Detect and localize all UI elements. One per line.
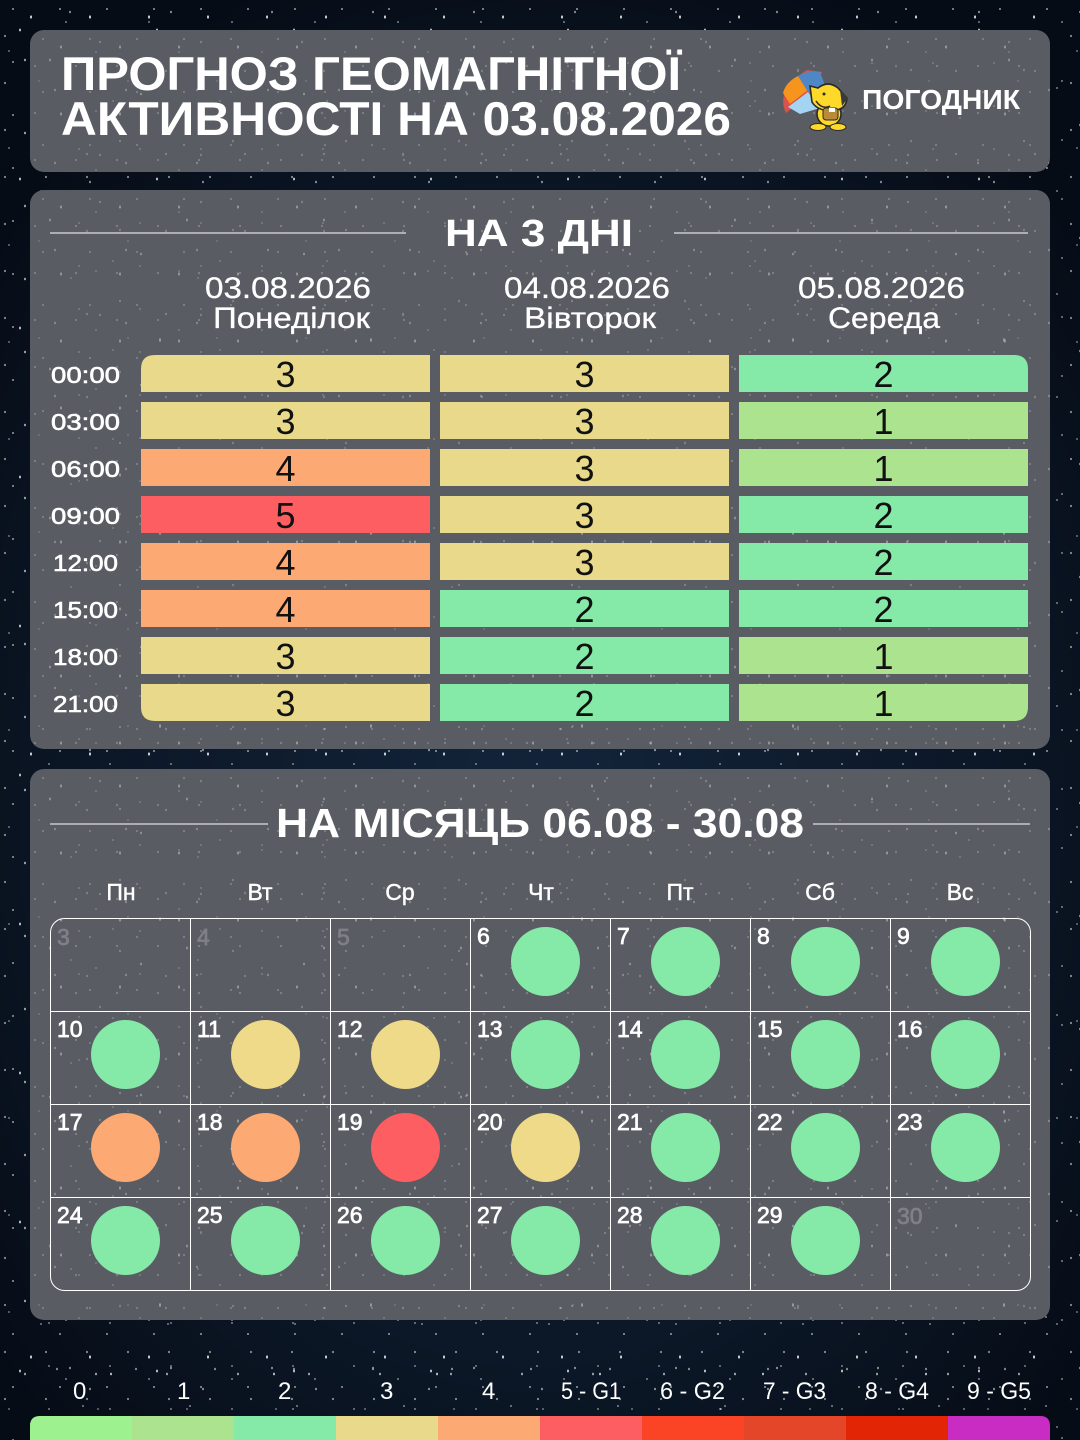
calendar day numbers: 25 bbox=[197, 1202, 223, 1228]
calendar day numbers: 18 bbox=[197, 1109, 223, 1135]
forecast column: Monday bbox=[141, 354, 430, 724]
calendar day numbers: 5 bbox=[337, 924, 350, 950]
weekday labels: Пт bbox=[666, 879, 694, 905]
forecast column: Wednesday: 2 bbox=[873, 354, 894, 395]
date headers: 03.08.2026 bbox=[205, 272, 371, 305]
calendar day numbers: 17 bbox=[57, 1109, 83, 1135]
legend labels: 2 bbox=[278, 1378, 291, 1405]
calendar day numbers: 3 bbox=[57, 924, 70, 950]
forecast column: Tuesday: 3 bbox=[574, 401, 595, 442]
weekday labels: Ср bbox=[385, 879, 415, 905]
legend labels: 7 - G3 bbox=[763, 1378, 826, 1405]
forecast column: Monday: 4 bbox=[275, 542, 296, 583]
calendar day numbers: 15 bbox=[757, 1016, 783, 1042]
time labels: 03:00 bbox=[51, 409, 120, 435]
calendar day numbers: 12 bbox=[337, 1016, 363, 1042]
calendar day numbers: 13 bbox=[477, 1016, 503, 1042]
calendar day numbers: 8 bbox=[757, 923, 770, 949]
calendar day numbers: 14 bbox=[617, 1016, 643, 1042]
logo wordmark: ПОГОДНИК bbox=[862, 84, 1021, 115]
date headers: Вівторок bbox=[524, 302, 657, 335]
time labels: 12:00 bbox=[53, 550, 118, 576]
legend labels: 6 - G2 bbox=[660, 1378, 725, 1405]
weekday labels: Вс bbox=[947, 879, 973, 905]
time labels: 09:00 bbox=[51, 503, 120, 529]
calendar day numbers: 16 bbox=[897, 1016, 923, 1042]
legend labels: 3 bbox=[380, 1378, 393, 1405]
forecast column: Monday: 5 bbox=[275, 495, 296, 536]
calendar day numbers bbox=[57, 923, 923, 1229]
legend labels: 4 bbox=[482, 1378, 495, 1405]
panel: 3-day forecast bbox=[30, 190, 1050, 749]
calendar day numbers: 23 bbox=[897, 1109, 923, 1135]
forecast column: Wednesday: 2 bbox=[873, 542, 894, 583]
weekday labels: Сб bbox=[805, 879, 835, 905]
forecast column: Wednesday: 2 bbox=[873, 495, 894, 536]
heading: month: НА МІСЯЦЬ 06.08 - 30.08 bbox=[276, 800, 804, 846]
calendar day numbers: 10 bbox=[57, 1016, 83, 1042]
forecast column: Tuesday: 2 bbox=[574, 683, 595, 724]
calendar day numbers: 24 bbox=[57, 1202, 83, 1228]
date headers: 05.08.2026 bbox=[798, 272, 965, 305]
forecast column: Wednesday: 1 bbox=[873, 448, 894, 489]
weekday labels bbox=[106, 879, 973, 905]
forecast column: Wednesday bbox=[739, 354, 1028, 724]
title: ПРОГНОЗ ГЕОМАГНІТНОЇ bbox=[61, 47, 682, 100]
calendar day numbers: 7 bbox=[617, 923, 630, 949]
forecast column: Monday: 3 bbox=[275, 636, 296, 677]
forecast column: Wednesday: 2 bbox=[873, 589, 894, 630]
title: АКТИВНОСТІ НА 03.08.2026 bbox=[61, 92, 731, 145]
calendar grid bbox=[50, 918, 1030, 1290]
forecast column: Tuesday bbox=[440, 354, 729, 724]
calendar day numbers: 22 bbox=[757, 1109, 783, 1135]
calendar day numbers: 27 bbox=[477, 1202, 503, 1228]
date headers: Понеділок bbox=[213, 302, 371, 335]
forecast column: Tuesday: 3 bbox=[574, 354, 595, 395]
time labels: 18:00 bbox=[53, 644, 118, 670]
legend: colour scale bbox=[30, 1378, 1050, 1440]
forecast column: Tuesday: 2 bbox=[574, 589, 595, 630]
weekday labels: Чт bbox=[528, 879, 554, 905]
forecast column: Tuesday: 3 bbox=[574, 448, 595, 489]
forecast column: Monday: 3 bbox=[275, 683, 296, 724]
legend colour bar bbox=[30, 1416, 1050, 1440]
legend labels: 0 bbox=[73, 1378, 86, 1405]
time labels: 00:00 bbox=[51, 362, 120, 388]
forecast column: Monday: 4 bbox=[275, 589, 296, 630]
calendar activity circles bbox=[91, 927, 1000, 1275]
legend labels: 5 - G1 bbox=[561, 1378, 621, 1405]
icon: Pogodnyk logo dog with umbrella bbox=[783, 70, 848, 130]
calendar day numbers: 30 bbox=[897, 1203, 923, 1229]
title bbox=[61, 47, 731, 145]
time labels: 21:00 bbox=[53, 691, 118, 717]
time labels bbox=[51, 362, 120, 717]
panel: header bbox=[30, 30, 1050, 172]
forecast column: Tuesday: 3 bbox=[574, 495, 595, 536]
calendar day numbers: 9 bbox=[897, 923, 910, 949]
time labels: 06:00 bbox=[51, 456, 120, 482]
time labels: 15:00 bbox=[53, 597, 118, 623]
heading: 3 days: НА 3 ДНІ bbox=[445, 213, 633, 255]
calendar day numbers: 26 bbox=[337, 1202, 363, 1228]
legend labels: 1 bbox=[177, 1378, 190, 1405]
forecast column: Wednesday: 1 bbox=[873, 401, 894, 442]
forecast column: Monday: 3 bbox=[275, 354, 296, 395]
panel: month forecast bbox=[30, 769, 1050, 1320]
forecast column: Wednesday: 1 bbox=[873, 636, 894, 677]
forecast column: Tuesday: 2 bbox=[574, 636, 595, 677]
calendar day numbers: 20 bbox=[477, 1109, 503, 1135]
date headers bbox=[205, 272, 965, 335]
legend labels: 8 - G4 bbox=[865, 1378, 929, 1405]
weekday labels: Вт bbox=[247, 879, 273, 905]
calendar day numbers: 28 bbox=[617, 1202, 643, 1228]
forecast column: Wednesday: 1 bbox=[873, 683, 894, 724]
calendar day numbers: 11 bbox=[197, 1016, 221, 1042]
forecast column: Monday: 3 bbox=[275, 401, 296, 442]
legend labels: 9 - G5 bbox=[967, 1378, 1031, 1405]
forecast column: Monday: 4 bbox=[275, 448, 296, 489]
calendar day numbers: 21 bbox=[617, 1109, 643, 1135]
legend labels bbox=[73, 1378, 1031, 1405]
calendar day numbers: 19 bbox=[337, 1109, 363, 1135]
calendar day numbers: 6 bbox=[477, 923, 490, 949]
date headers: Середа bbox=[828, 302, 940, 335]
calendar day numbers: 4 bbox=[197, 924, 210, 950]
calendar day numbers: 29 bbox=[757, 1202, 783, 1228]
date headers: 04.08.2026 bbox=[504, 272, 670, 305]
weekday labels: Пн bbox=[106, 879, 136, 905]
forecast column: Tuesday: 3 bbox=[574, 542, 595, 583]
